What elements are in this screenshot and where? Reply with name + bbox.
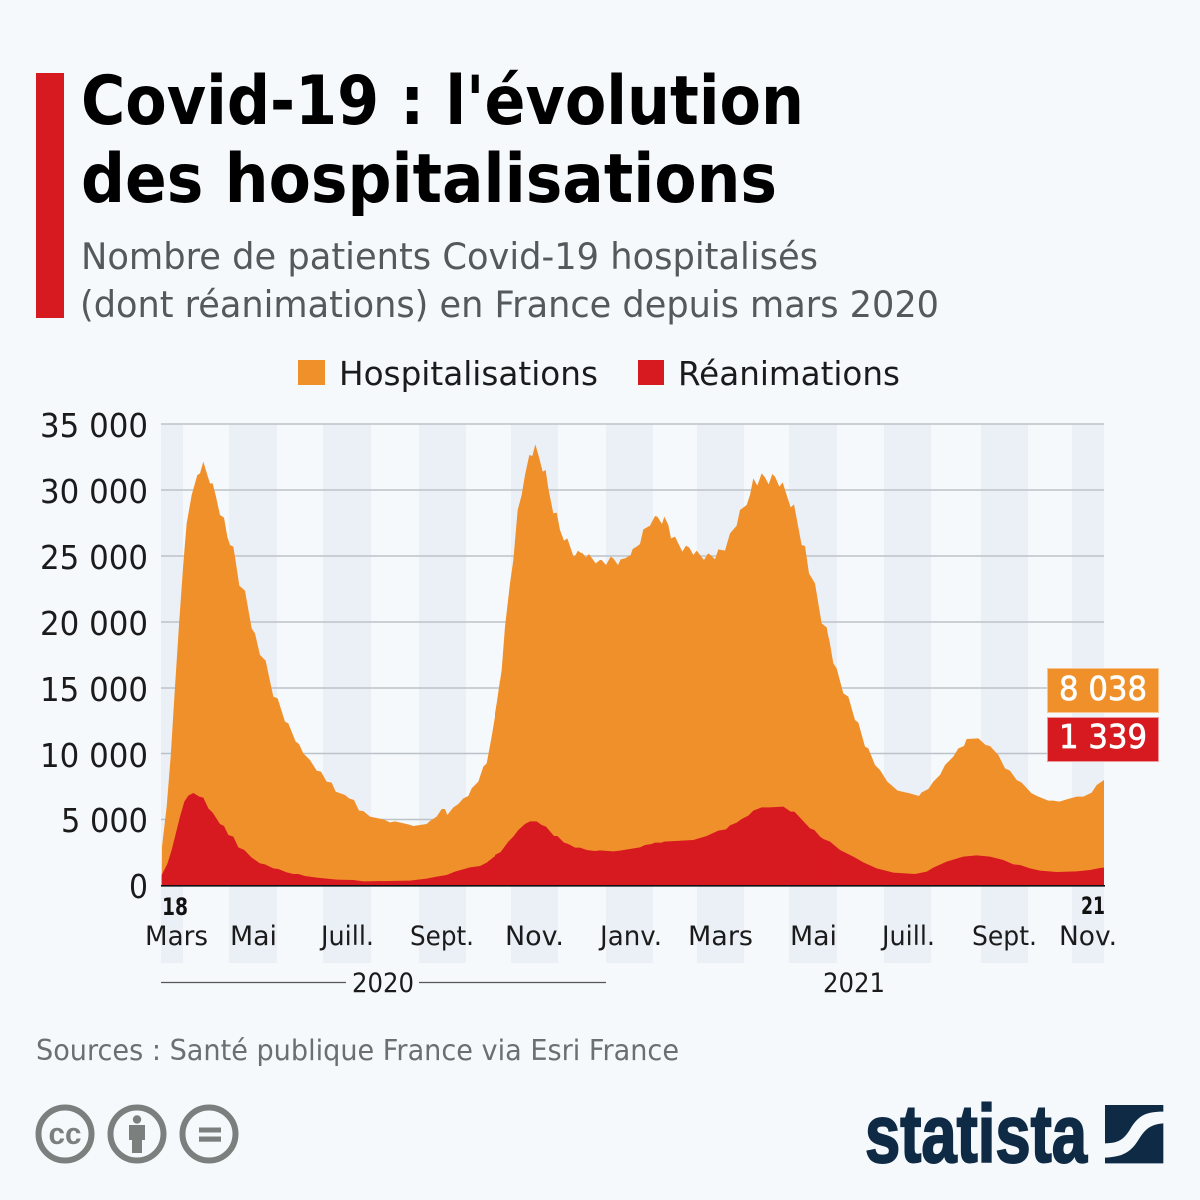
x axis day labels: 18 <box>162 893 188 921</box>
icon: statista logo <box>1105 1105 1163 1163</box>
subtitle <box>80 235 939 326</box>
end value label: réanimations: 1 339 <box>1059 718 1147 756</box>
x axis month labels: Juill. <box>319 921 374 952</box>
x axis month labels: Nov. <box>1059 921 1117 952</box>
x axis month labels: Mai <box>230 921 277 952</box>
x axis month labels: Juill. <box>880 921 935 952</box>
x axis day labels <box>162 892 1105 921</box>
year label 2020: 2020 <box>352 968 414 999</box>
y axis labels <box>40 407 148 906</box>
y axis labels: 25 000 <box>40 539 148 577</box>
subtitle: Nombre de patients Covid-19 hospitalisés <box>81 235 818 278</box>
icon: attribution <box>110 1108 164 1160</box>
x axis month labels: Mars <box>688 921 753 952</box>
sources: Sources : Santé publique France via Esri France <box>36 1034 679 1067</box>
legend <box>298 354 900 393</box>
y axis labels: 15 000 <box>40 671 148 709</box>
icon: creative commons: cc <box>48 1116 82 1151</box>
x axis month labels: Sept. <box>972 921 1037 952</box>
x axis month labels: Nov. <box>505 921 564 952</box>
icon: no derivatives <box>182 1108 236 1160</box>
legend: Réanimations <box>678 354 900 393</box>
end value label: hospitalisations: 8 038 <box>1059 670 1147 708</box>
x axis day labels: 21 <box>1081 892 1105 920</box>
year label 2021: 2021 <box>823 968 885 999</box>
y axis labels: 0 <box>129 868 148 906</box>
title <box>81 62 804 219</box>
y axis labels: 30 000 <box>40 473 148 511</box>
x axis month labels: Mai <box>790 921 837 952</box>
x axis month labels <box>145 921 1117 952</box>
x axis month labels: Sept. <box>410 921 474 952</box>
area: hospitalisations <box>162 444 1104 886</box>
title: des hospitalisations <box>81 140 777 219</box>
title accent bar <box>36 73 64 318</box>
x axis month labels: Janv. <box>598 921 662 952</box>
x axis month labels: Mars <box>145 921 208 952</box>
alternating month bands <box>161 424 1104 963</box>
y axis labels: 35 000 <box>40 407 148 445</box>
title: Covid-19 : l'évolution <box>81 62 804 141</box>
y axis labels: 10 000 <box>40 737 148 775</box>
legend: Hospitalisations <box>339 354 598 393</box>
subtitle: (dont réanimations) en France depuis mars 2020 <box>80 283 939 326</box>
statista wordmark: statista <box>865 1089 1088 1180</box>
icon: creative commons <box>38 1108 92 1160</box>
y axis labels: 5 000 <box>61 802 148 840</box>
y axis labels: 20 000 <box>40 605 148 643</box>
area: réanimations <box>162 793 1104 886</box>
